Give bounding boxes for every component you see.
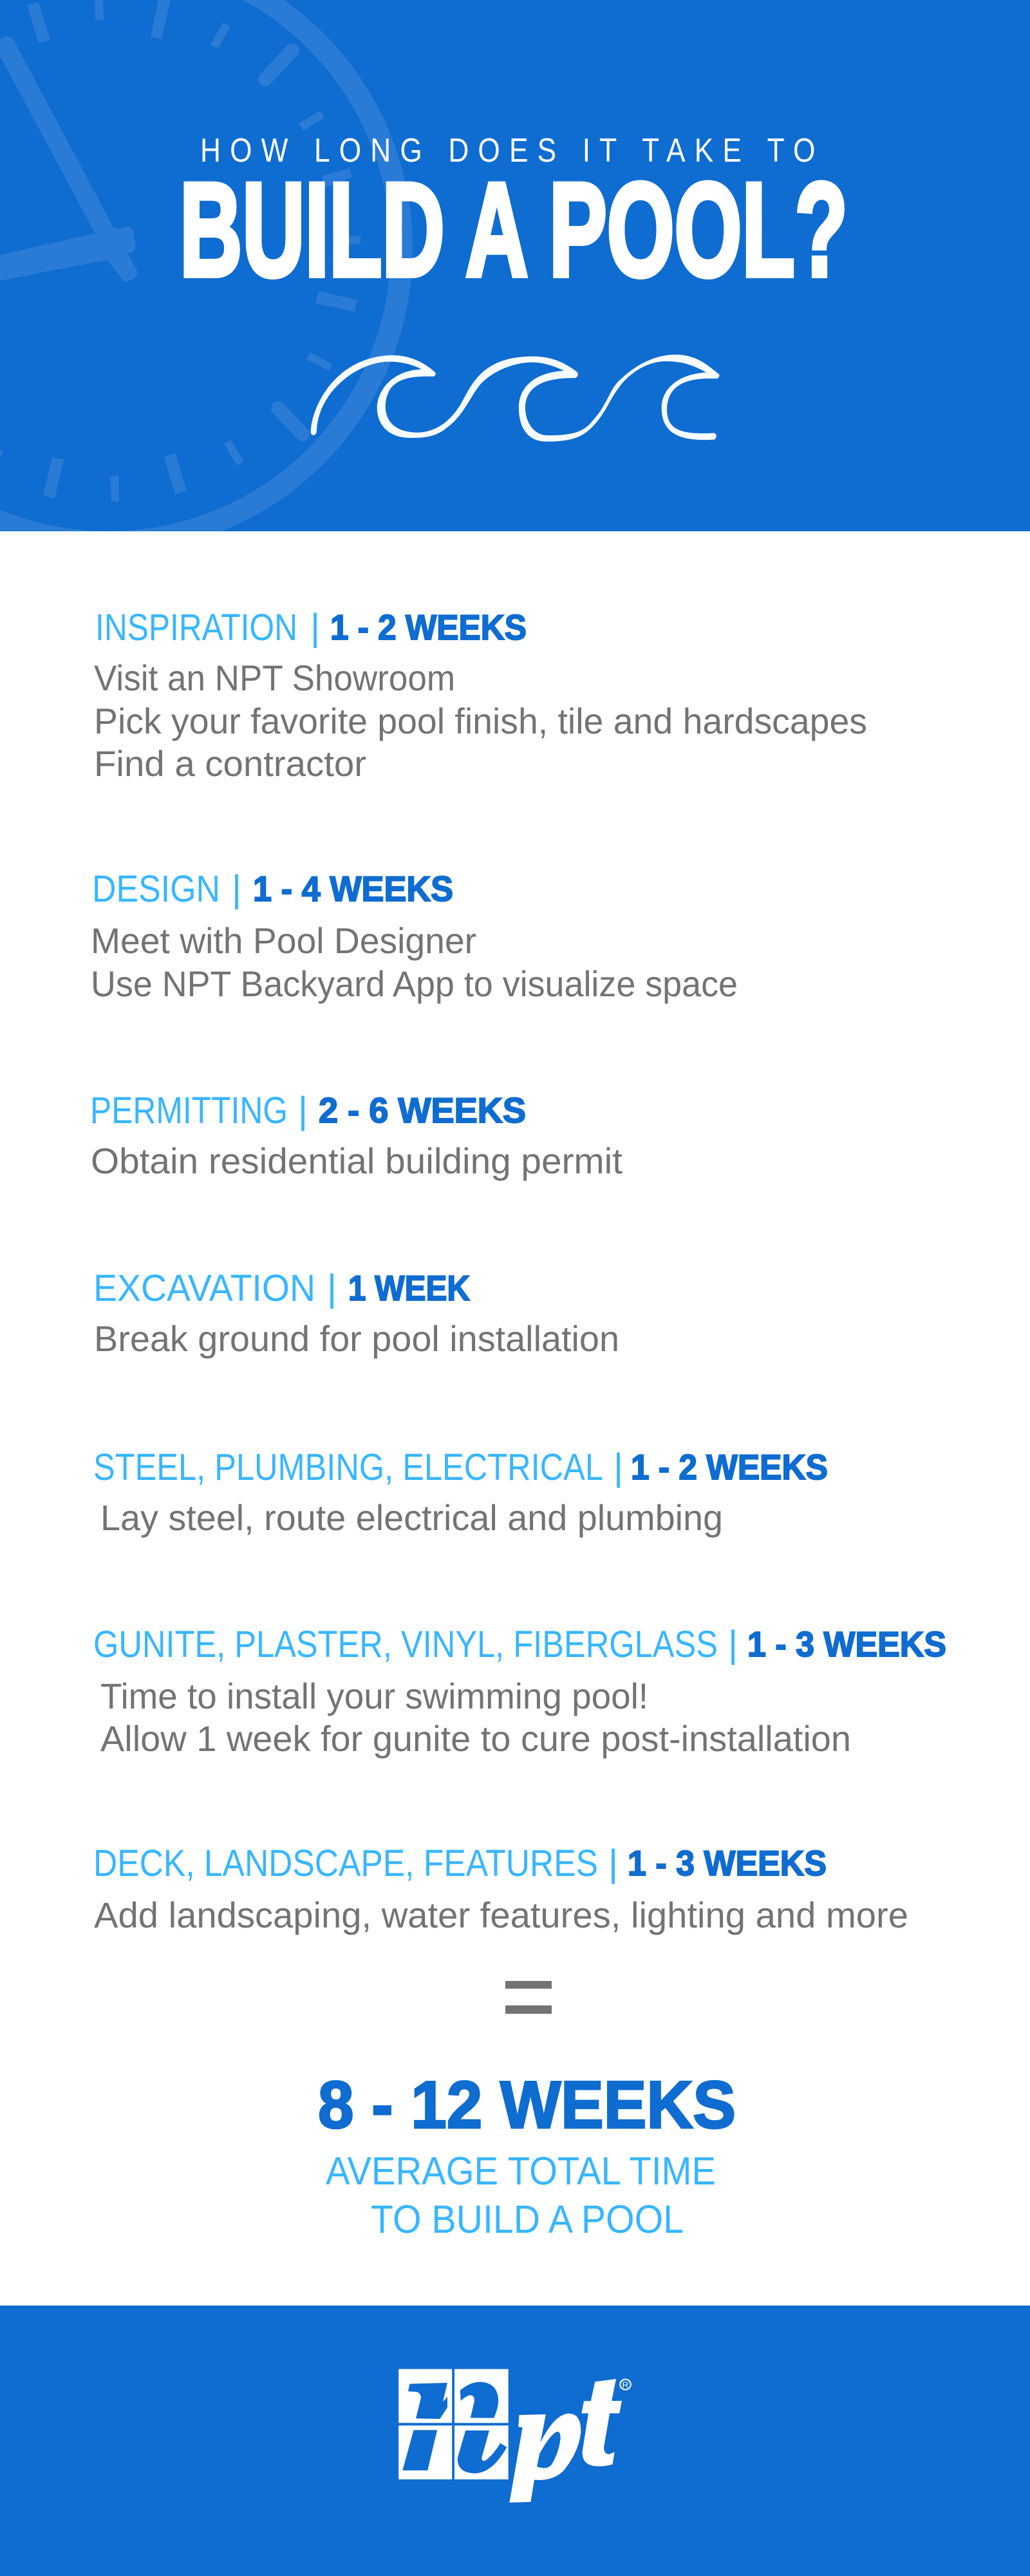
step: deck, landscape, features xyxy=(93,1842,908,1935)
panel: footer xyxy=(0,2306,1030,2576)
step: gunite, plaster, vinyl, fiberglass: Allow 1 week for gunite to cure post-installation xyxy=(100,1718,851,1759)
step: permitting: PERMITTING xyxy=(90,1090,288,1132)
step: excavation: EXCAVATION xyxy=(93,1267,315,1309)
step: deck, landscape, features: DECK, LANDSCAPE, FEATURES xyxy=(93,1842,598,1884)
step: excavation: 1 WEEK xyxy=(348,1268,470,1308)
step: gunite, plaster, vinyl, fiberglass: 1 - 3 WEEKS xyxy=(747,1624,946,1664)
step: steel, plumbing, electrical: STEEL, PLUMBING, ELECTRICAL xyxy=(93,1446,603,1488)
step: gunite, plaster, vinyl, fiberglass: | xyxy=(728,1624,738,1665)
step: inspiration xyxy=(94,607,867,784)
step: inspiration: | xyxy=(310,607,320,649)
step: steel, plumbing, electrical: | xyxy=(613,1446,623,1488)
step: inspiration: Find a contractor xyxy=(94,743,366,784)
step: permitting: | xyxy=(298,1090,308,1132)
step: inspiration: 1 - 2 WEEKS xyxy=(330,607,527,647)
step: inspiration: Pick your favorite pool finish, tile and hardscapes xyxy=(94,701,867,741)
icon: background clock xyxy=(0,0,402,542)
step: permitting xyxy=(90,1090,623,1181)
step: gunite, plaster, vinyl, fiberglass: Time to install your swimming pool! xyxy=(100,1676,648,1716)
title: how long does it take to: HOW LONG DOES IT TAKE TO xyxy=(200,132,815,169)
step: design: | xyxy=(232,868,241,910)
step: permitting: Obtain residential building permit xyxy=(91,1141,623,1181)
caption: average total time to build a pool: AVERAGE TOTAL TIME xyxy=(326,2149,716,2193)
icon: waves xyxy=(311,355,719,442)
caption: average total time to build a pool: TO BUILD A POOL xyxy=(371,2197,684,2241)
step: steel, plumbing, electrical: Lay steel, route electrical and plumbing xyxy=(100,1497,723,1538)
step: permitting: 2 - 6 WEEKS xyxy=(319,1090,526,1130)
step: gunite, plaster, vinyl, fiberglass: GUNITE, PLASTER, VINYL, FIBERGLASS xyxy=(93,1624,718,1665)
total: 8 - 12 weeks: 8 - 12 WEEKS xyxy=(318,2068,736,2143)
step: gunite, plaster, vinyl, fiberglass xyxy=(93,1624,946,1759)
logo: npt: R xyxy=(623,2380,629,2389)
step: deck, landscape, features: | xyxy=(608,1842,618,1884)
step: design: Use NPT Backyard App to visualize space xyxy=(91,963,738,1004)
caption: average total time to build a pool xyxy=(326,2149,716,2241)
step: excavation: | xyxy=(327,1267,337,1309)
step: design: 1 - 4 WEEKS xyxy=(253,869,453,909)
step: inspiration: Visit an NPT Showroom xyxy=(94,658,455,698)
step: design: DESIGN xyxy=(92,868,220,910)
step: steel, plumbing, electrical: 1 - 2 WEEKS xyxy=(631,1447,828,1487)
step: inspiration: INSPIRATION xyxy=(95,607,297,649)
icon: equals sign xyxy=(505,1981,552,2014)
step: design xyxy=(91,868,738,1004)
step: deck, landscape, features: Add landscaping, water features, lighting and more xyxy=(94,1895,908,1935)
step: deck, landscape, features: 1 - 3 WEEKS xyxy=(628,1843,827,1883)
step: steel, plumbing, electrical xyxy=(93,1446,828,1538)
step: excavation: Break ground for pool installation xyxy=(94,1318,619,1359)
panel: header xyxy=(0,0,1030,542)
step: excavation xyxy=(93,1267,619,1359)
step: design: Meet with Pool Designer xyxy=(91,920,476,961)
logo: npt xyxy=(398,2369,631,2503)
